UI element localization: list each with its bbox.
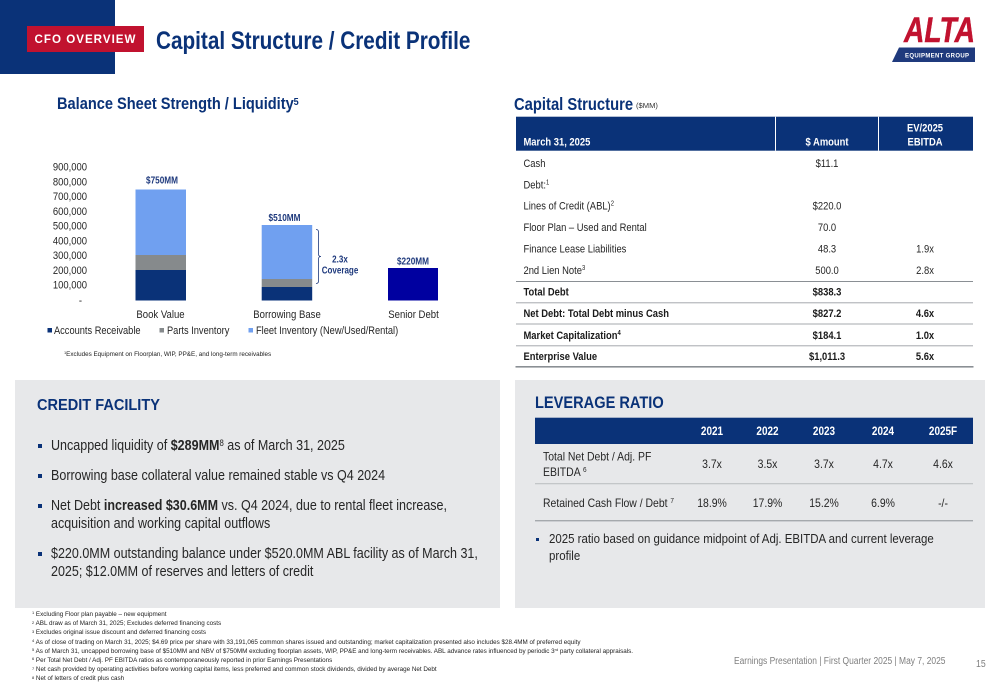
heading: balance sheet strength: Balance Sheet Strength / Liquidity5 <box>57 95 299 113</box>
total rows: Total Debt <box>523 287 569 299</box>
y axis labels: 500,000 <box>53 221 87 233</box>
category labels: Borrowing Base <box>253 308 321 321</box>
panel: credit facility <box>15 380 500 608</box>
row: retained cash flow: 7 <box>670 498 674 505</box>
bullet: uncapped liquidity: Uncapped liquidity of $289MM8 as of March 31, 2025 <box>51 438 345 454</box>
table header: EV/2025 <box>907 123 943 135</box>
debt rows: 2 <box>611 200 614 208</box>
section tag: CFO overview <box>27 26 144 52</box>
bar: book value <box>136 190 186 300</box>
total rows: 1.0x <box>916 330 934 342</box>
heading: leverage ratio: LEVERAGE RATIO <box>535 393 664 412</box>
footnotes: 5 As of March 31, uncapped borrowing base of $510MM and NBV of $750MM excluding floorplan assets, WIP, PP&E and long-term receivables. ABL advance rates influenced by periodic 3rd party collateral appraisals. <box>32 647 633 655</box>
title: Capital Structure / Credit Profile <box>156 27 470 55</box>
debt rows <box>524 158 935 277</box>
footer: presentation info: Earnings Presentation | First Quarter 2025 | May 7, 2025 <box>734 656 945 667</box>
stacked bar chart: collateral vs senior debt <box>48 162 439 337</box>
debt rows: 1.9x <box>916 244 935 256</box>
category labels: Book Value <box>136 308 185 321</box>
coverage label <box>322 254 358 276</box>
row: retained cash flow: -/- <box>938 498 948 510</box>
bullet: net debt: Net Debt increased $30.6MM vs. Q4 2024, due to rental fleet increase, <box>51 498 447 514</box>
debt rows: 500.0 <box>815 265 839 277</box>
bullet: outstanding balance: $220.0MM outstanding balance under $520.0MM ABL facility as of March 31, <box>51 546 478 562</box>
bullet: 2025 ratio note: profile <box>549 549 580 563</box>
header blue block <box>0 0 115 74</box>
debt rows: 48.3 <box>818 244 836 256</box>
table header: $ Amount <box>806 137 849 149</box>
total rows: $838.3 <box>813 287 842 299</box>
row: retained cash flow: 17.9% <box>753 498 782 510</box>
row: total net debt: EBITDA <box>543 467 580 479</box>
row: total net debt: 3.5x <box>758 459 778 471</box>
bar: senior debt <box>388 268 438 300</box>
legend: Parts Inventory <box>167 325 230 337</box>
bullet: outstanding balance <box>38 546 478 580</box>
row: total net debt: 4.7x <box>873 459 893 471</box>
chart footnote: ​1Excludes Equipment on Floorplan, WIP, PP&E, and long-term receivables <box>64 350 271 358</box>
y axis labels: 400,000 <box>53 236 87 248</box>
bullet: 2025 ratio note: 2025 ratio based on guidance midpoint of Adj. EBITDA and current leverage <box>549 532 934 546</box>
total rows: 4.6x <box>916 308 934 320</box>
row: total net debt: Total Net Debt / Adj. PF <box>543 451 652 464</box>
row: retained cash flow: Retained Cash Flow / Debt <box>543 498 668 510</box>
bullet: net debt: acquisition and working capital outflows <box>51 516 270 532</box>
footnotes: 8 Net of letters of credit plus cash <box>32 675 124 682</box>
heading: capital structure: Capital Structure <box>514 94 633 114</box>
row: retained cash flow: 6.9% <box>871 498 895 510</box>
total rows: Market Capitalization <box>524 330 617 342</box>
bar: borrowing base <box>262 225 312 300</box>
debt rows: 3 <box>582 265 586 272</box>
footnotes: 3 Excludes original issue discount and deferred financing costs <box>32 629 206 636</box>
debt rows: $220.0 <box>813 201 842 213</box>
total rows: Enterprise Value <box>523 351 597 363</box>
table header: 2022 <box>756 425 779 438</box>
debt rows: Debt: <box>524 180 546 192</box>
debt rows: 2nd Lien Note <box>524 265 582 277</box>
legend: Fleet Inventory (New/Used/Rental) <box>256 325 398 337</box>
table header <box>516 117 973 151</box>
footnotes: 6 Per Total Net Debt / Adj. PF EBITDA ratios as contemporaneously reported in prior Earnings Presentations <box>32 656 332 664</box>
panel: leverage ratio <box>515 380 985 608</box>
legend <box>48 325 398 337</box>
logo: Alta Equipment Group: ALTA <box>903 11 975 50</box>
bullet: 2025 ratio note <box>536 532 934 563</box>
table: capital structure <box>516 116 974 368</box>
bar value labels: $220MM <box>397 256 429 267</box>
total rows: 5.6x <box>916 351 934 363</box>
row: total net debt: 3.7x <box>702 459 722 471</box>
table header: EBITDA <box>908 137 943 149</box>
row: total net debt: 3.7x <box>814 459 834 471</box>
total rows: $827.2 <box>813 308 842 320</box>
y axis labels <box>53 162 87 307</box>
row: retained cash flow: 15.2% <box>809 498 839 510</box>
debt rows: 70.0 <box>818 222 836 234</box>
debt rows: Floor Plan – Used and Rental <box>523 222 647 234</box>
table header: 2023 <box>813 425 835 438</box>
debt rows: 1 <box>546 179 550 187</box>
category labels <box>136 308 439 321</box>
bullet: outstanding balance: 2025; $12.0MM of reserves and letters of credit <box>51 564 313 580</box>
row: total net debt <box>543 451 953 479</box>
total rows <box>524 287 934 363</box>
logo: Alta Equipment Group <box>892 11 975 62</box>
bar value labels <box>146 175 429 267</box>
total rows: $184.1 <box>813 330 842 342</box>
row: total net debt: 4.6x <box>933 459 953 471</box>
total rows: Net Debt: Total Debt minus Cash <box>523 308 669 320</box>
debt rows: $11.1 <box>816 158 839 170</box>
footnotes: 7 Net cash provided by operating activities before working capital items, less preferred and common stock dividends, divided by average Net Debt <box>32 666 437 673</box>
y axis labels: 100,000 <box>53 280 87 292</box>
debt rows: Cash <box>523 158 546 170</box>
footnotes: 4 As of close of trading on March 31, 2025; $4.69 price per share with 33,191,065 common shares issued and outstanding; market capitalization presented also includes $28.4MM of preferred equity <box>32 638 581 646</box>
row: retained cash flow <box>543 498 948 510</box>
table header: 2025F <box>929 425 958 438</box>
bar value labels: $750MM <box>146 175 178 186</box>
row: retained cash flow: 18.9% <box>697 498 727 510</box>
footnotes: 2 ABL draw as of March 31, 2025; Excludes deferred financing costs <box>32 620 221 627</box>
y axis labels: - <box>79 295 83 307</box>
coverage label: 2.3x <box>332 254 348 265</box>
row: total net debt: 6 <box>583 467 587 474</box>
logo: Alta Equipment Group: EQUIPMENT GROUP <box>905 54 969 60</box>
y axis labels: 200,000 <box>53 265 87 277</box>
page number: 15 <box>976 659 986 670</box>
debt rows: Finance Lease Liabilities <box>523 244 626 256</box>
table header: 2021 <box>701 425 723 438</box>
y axis labels: 900,000 <box>53 162 87 174</box>
coverage bracket <box>316 230 321 284</box>
table: leverage ratio <box>535 418 973 522</box>
section tag: CFO overview: CFO OVERVIEW <box>34 33 136 46</box>
y axis labels: 700,000 <box>53 191 87 203</box>
total rows: $1,011.3 <box>809 351 845 363</box>
y axis labels: 800,000 <box>53 177 87 189</box>
legend: Accounts Receivable <box>54 325 141 337</box>
table header: 2024 <box>872 425 894 438</box>
table header: March 31, 2025 <box>523 137 591 149</box>
table header <box>535 418 973 444</box>
debt rows: Lines of Credit (ABL) <box>524 201 611 213</box>
debt rows: 2.8x <box>916 265 935 277</box>
total rows: 4 <box>617 330 621 337</box>
y axis labels: 600,000 <box>53 206 87 218</box>
footnotes: 1 Excluding Floor plan payable – new equipment <box>32 610 166 618</box>
y axis labels: 300,000 <box>53 250 87 262</box>
category labels: Senior Debt <box>388 308 439 321</box>
footnotes <box>32 610 633 682</box>
bullet: borrowing base: Borrowing base collateral value remained stable vs Q4 2024 <box>51 468 385 484</box>
bullet: net debt <box>38 498 447 532</box>
coverage label: Coverage <box>322 265 358 276</box>
heading: credit facility: CREDIT FACILITY <box>37 397 160 414</box>
bar value labels: $510MM <box>268 212 301 223</box>
unit label: ($MM) <box>636 101 658 110</box>
